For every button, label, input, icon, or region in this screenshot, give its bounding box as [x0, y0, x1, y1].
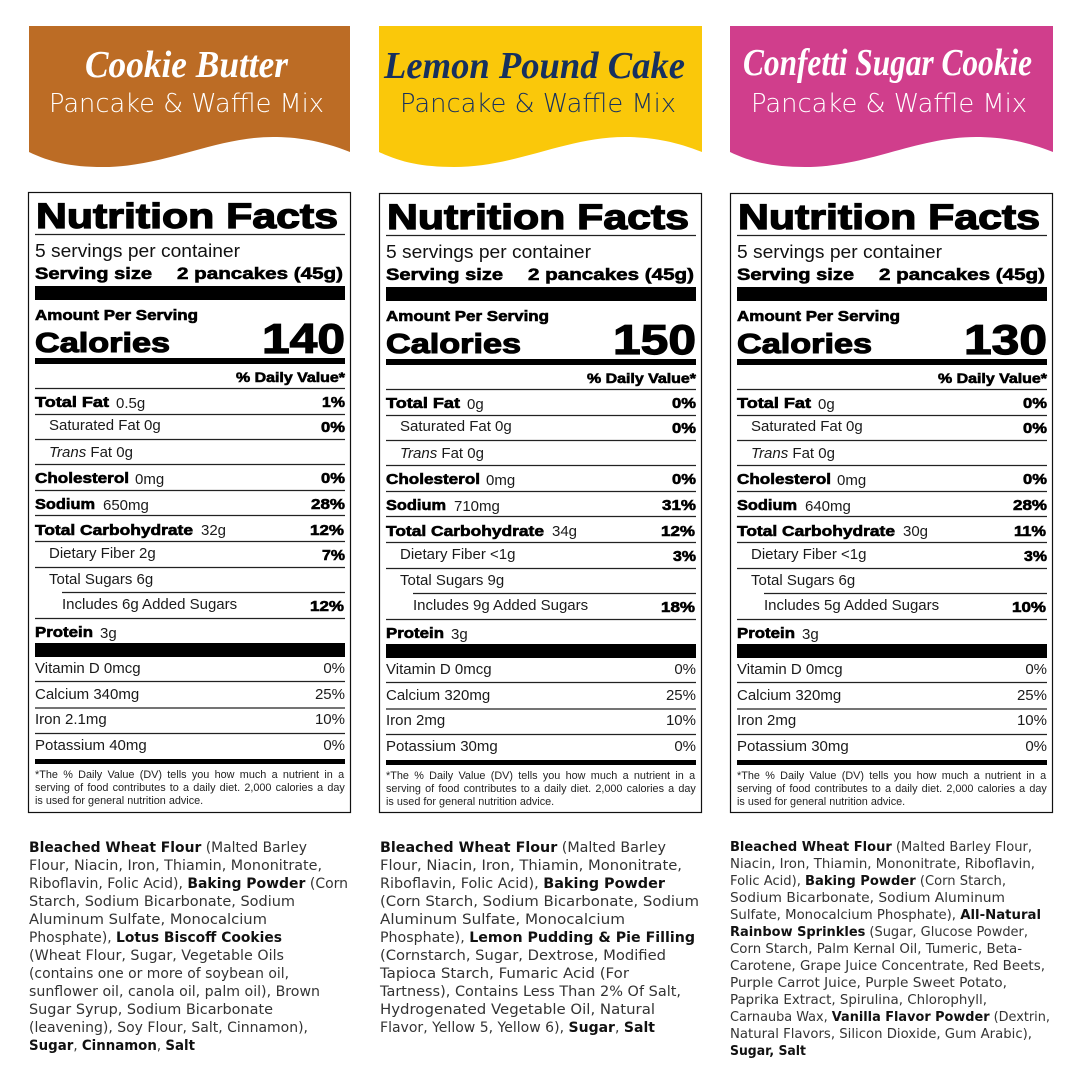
nutrient rows: 0% [1023, 420, 1047, 437]
vitamins and minerals: 0% [1025, 738, 1047, 755]
vitamins and minerals: Vitamin D 0mcg [35, 660, 141, 677]
calories [35, 308, 346, 385]
nutrient rows: 30g [903, 523, 928, 540]
vitamins and minerals: Vitamin D 0mcg [737, 661, 843, 678]
nutrient rows: 0% [672, 471, 696, 488]
nutrient rows: 0.5g [116, 395, 145, 412]
panel: nutrition facts confetti sugar cookie [730, 194, 1052, 812]
nutrient rows: 1% [322, 394, 345, 411]
calories: Calories [386, 328, 521, 359]
vitamins and minerals: 0% [1025, 661, 1047, 678]
text block: confetti sugar cookie ingredients: Carnauba Wax, Vanilla Flavor Powder (Dextrin, [730, 1010, 1050, 1025]
nutrient rows: 0% [672, 420, 696, 437]
text block: lemon pound cake ingredients: Aluminum Sulfate, Monocalcium [380, 912, 625, 928]
vitamins and minerals: 25% [666, 687, 696, 704]
servings [35, 240, 343, 283]
text block: lemon pound cake ingredients: (Corn Starch, Sodium Bicarbonate, Sodium [380, 894, 699, 910]
text block: cookie butter ingredients: Phosphate), Lotus Biscoff Cookies [29, 930, 282, 946]
nutrient rows: 12% [310, 598, 344, 615]
footnote: is used for general nutrition advice. [737, 796, 905, 808]
calories: Calories [35, 327, 170, 358]
vitamins and minerals: Potassium 30mg [737, 738, 849, 755]
nutrient rows: 11% [1014, 523, 1046, 540]
title: Nutrition Facts [36, 197, 338, 236]
text block: confetti sugar cookie ingredients: Folic Acid), Baking Powder (Corn Starch, [730, 874, 1006, 889]
vitamins and minerals: 25% [1017, 687, 1047, 704]
text block: lemon pound cake ingredients: Bleached Wheat Flour (Malted Barley [380, 840, 666, 856]
text block: confetti sugar cookie ingredients: Purple Carrot Juice, Purple Sweet Potato, [730, 976, 1007, 991]
nutrient rows: 0% [672, 395, 696, 412]
footnote [35, 769, 345, 807]
nutrient rows: 3% [1024, 548, 1047, 565]
footnote: is used for general nutrition advice. [386, 796, 554, 808]
text block: cookie butter ingredients: (leavening), Soy Flour, Salt, Cinnamon), [29, 1020, 308, 1036]
nutrient rows: Total Sugars 6g [751, 572, 855, 589]
calories: Amount Per Serving [35, 308, 198, 324]
nutrient rows: 3g [802, 626, 819, 643]
nutrient rows: Includes 9g Added Sugars [413, 597, 588, 614]
text block: cookie butter ingredients [29, 840, 348, 1054]
panel: cookie butter banner [29, 26, 350, 167]
calories: 140 [262, 315, 345, 362]
footnote: serving of food contributes to a daily diet. 2,000 calories a day [386, 783, 696, 795]
vitamins and minerals [386, 661, 696, 755]
nutrient rows: 650mg [103, 497, 149, 514]
text block: lemon pound cake ingredients: Phosphate), Lemon Pudding & Pie Filling [380, 930, 695, 946]
nutrient rows: 0% [1023, 471, 1047, 488]
vitamins and minerals: 25% [315, 686, 345, 703]
nutrient rows: 31% [662, 497, 696, 514]
text block: lemon pound cake ingredients: Flour, Niacin, Iron, Thiamin, Mononitrate, [380, 858, 682, 874]
nutrient rows: 0% [321, 419, 345, 436]
nutrient rows: Protein [35, 624, 93, 641]
nutrient rows: Cholesterol [737, 471, 831, 488]
nutrient rows: Dietary Fiber <1g [400, 546, 515, 563]
text block: confetti sugar cookie ingredients: Bleached Wheat Flour (Malted Barley Flour, [730, 840, 1032, 855]
text block: cookie butter ingredients: Sugar Syrup, Sodium Bicarbonate [29, 1002, 273, 1018]
text block: cookie butter ingredients: (Wheat Flour, Sugar, Vegetable Oils [29, 948, 284, 964]
text block: lemon pound cake ingredients: Tartness), Contains Less Than 2% Of Salt, [379, 984, 681, 1000]
text block: cookie butter ingredients: Starch, Sodium Bicarbonate, Sodium [29, 894, 295, 910]
text block: confetti sugar cookie ingredients: Niacin, Iron, Thiamin, Mononitrate, Riboflavin, [730, 857, 1035, 872]
nutrient rows: 0g [467, 396, 484, 413]
nutrient rows: Saturated Fat 0g [400, 418, 512, 435]
nutrient rows: Trans Fat 0g [49, 444, 133, 461]
nutrient rows [35, 394, 345, 642]
nutrient rows: Cholesterol [35, 470, 129, 487]
nutrient rows: Dietary Fiber 2g [49, 545, 156, 562]
text block: lemon pound cake ingredients: Tapioca Starch, Fumaric Acid (For [379, 966, 629, 982]
vitamins and minerals: Calcium 340mg [35, 686, 139, 703]
text block: lemon pound cake ingredients: (Cornstarch, Sugar, Dextrose, Modified [380, 948, 666, 964]
vitamins and minerals: 10% [666, 712, 696, 729]
footnote [386, 770, 696, 808]
vitamins and minerals [737, 661, 1047, 755]
nutrient rows: Dietary Fiber <1g [751, 546, 866, 563]
nutrient rows: 34g [552, 523, 577, 540]
text block: cookie butter ingredients: Bleached Wheat Flour (Malted Barley [29, 840, 307, 856]
text block: confetti sugar cookie ingredients: Sugar, Salt [730, 1044, 807, 1059]
nutrient rows: Sodium [386, 497, 446, 514]
vitamins and minerals: Iron 2mg [737, 712, 796, 729]
servings: Serving size [737, 265, 854, 284]
calories: Amount Per Serving [386, 309, 549, 325]
nutrient rows: Protein [737, 625, 795, 642]
nutrient rows: Trans Fat 0g [400, 445, 484, 462]
text block: lemon pound cake ingredients [379, 840, 699, 1036]
calories [737, 309, 1048, 386]
title: Nutrition Facts [738, 198, 1040, 237]
vitamins and minerals: Calcium 320mg [386, 687, 490, 704]
text block: lemon pound cake ingredients: Hydrogenated Vegetable Oil, Natural [380, 1002, 655, 1018]
vitamins and minerals: 0% [674, 738, 696, 755]
vitamins and minerals: Iron 2.1mg [35, 711, 107, 728]
subheading: mix: Pancake & Waffle Mix [751, 89, 1027, 119]
vitamins and minerals: 0% [674, 661, 696, 678]
nutrient rows: Trans Fat 0g [751, 445, 835, 462]
text block: confetti sugar cookie ingredients: Rainbow Sprinkles (Sugar, Glucose Powder, [730, 925, 1028, 940]
servings [737, 241, 1045, 284]
panel: nutrition facts lemon pound cake [380, 194, 702, 812]
nutrient rows: Sodium [35, 496, 95, 513]
vitamins and minerals: Vitamin D 0mcg [386, 661, 492, 678]
nutrient rows: Total Carbohydrate [386, 523, 544, 540]
nutrient rows: 0% [1023, 395, 1047, 412]
panel: nutrition facts cookie butter [28, 192, 350, 812]
text block: confetti sugar cookie ingredients: Natural Flavors, Silicon Dioxide, Gum Arabic), [730, 1027, 1032, 1042]
nutrient rows: Total Carbohydrate [35, 522, 193, 539]
nutrient rows: 18% [661, 599, 695, 616]
vitamins and minerals: 0% [323, 737, 345, 754]
calories [386, 309, 697, 386]
nutrient rows: 12% [661, 523, 695, 540]
heading: lemon pound cake: Lemon Pound Cake [383, 45, 685, 87]
calories: % Daily Value* [938, 371, 1048, 386]
nutrient rows: 640mg [805, 498, 851, 515]
servings [386, 241, 694, 284]
title: Nutrition Facts [387, 198, 689, 237]
servings: 5 servings per container [737, 241, 942, 262]
nutrient rows: 12% [310, 522, 344, 539]
vitamins and minerals: 10% [315, 711, 345, 728]
servings: 2 pancakes (45g) [528, 265, 694, 284]
servings: 5 servings per container [386, 241, 591, 262]
nutrient rows: 3% [673, 548, 696, 565]
heading: cookie butter: Cookie Butter [85, 44, 289, 86]
text block: cookie butter ingredients: Riboflavin, Folic Acid), Baking Powder (Corn [29, 876, 348, 892]
text block: confetti sugar cookie ingredients: Carotene, Grape Juice Concentrate, Red Beets, [730, 959, 1045, 974]
nutrient rows: Total Sugars 9g [400, 572, 504, 589]
nutrient rows: 3g [100, 625, 117, 642]
footnote: is used for general nutrition advice. [35, 795, 203, 807]
nutrient rows: 28% [1013, 497, 1047, 514]
text block: cookie butter ingredients: Aluminum Sulfate, Monocalcium [29, 912, 267, 928]
servings: 2 pancakes (45g) [879, 265, 1045, 284]
nutrient rows: Total Fat [35, 394, 109, 411]
text block: confetti sugar cookie ingredients: Corn Starch, Palm Kernal Oil, Tumeric, Beta- [730, 942, 1022, 957]
nutrient rows: 0g [818, 396, 835, 413]
servings: Serving size [35, 264, 152, 283]
nutrient rows: Total Fat [386, 395, 460, 412]
nutrient rows: Includes 6g Added Sugars [62, 596, 237, 613]
nutrient rows: 0mg [837, 472, 866, 489]
calories: 130 [964, 316, 1047, 363]
vitamins and minerals: Potassium 40mg [35, 737, 147, 754]
subheading: mix: Pancake & Waffle Mix [400, 89, 676, 119]
nutrient rows: 0mg [486, 472, 515, 489]
footnote: *The % Daily Value (DV) tells you how much a nutrient in a [35, 769, 345, 781]
panel: lemon pound cake banner [379, 26, 702, 167]
text block: cookie butter ingredients: Flour, Niacin, Iron, Thiamin, Mononitrate, [29, 858, 322, 874]
vitamins and minerals: Calcium 320mg [737, 687, 841, 704]
servings: Serving size [386, 265, 503, 284]
nutrient rows: Saturated Fat 0g [49, 417, 161, 434]
nutrient rows: Protein [386, 625, 444, 642]
text block: lemon pound cake ingredients: Flavor, Yellow 5, Yellow 6), Sugar, Salt [380, 1020, 655, 1036]
calories: 150 [613, 316, 696, 363]
nutrient rows: Includes 5g Added Sugars [764, 597, 939, 614]
vitamins and minerals: 10% [1017, 712, 1047, 729]
vitamins and minerals: Iron 2mg [386, 712, 445, 729]
nutrient rows: 3g [451, 626, 468, 643]
servings: 5 servings per container [35, 240, 240, 261]
nutrient rows: Cholesterol [386, 471, 480, 488]
vitamins and minerals: Potassium 30mg [386, 738, 498, 755]
text block: lemon pound cake ingredients: Riboflavin, Folic Acid), Baking Powder [380, 876, 665, 892]
nutrient rows: 32g [201, 522, 226, 539]
calories: % Daily Value* [236, 370, 346, 385]
footnote: serving of food contributes to a daily diet. 2,000 calories a day [737, 783, 1047, 795]
nutrient rows [737, 395, 1047, 643]
footnote: serving of food contributes to a daily diet. 2,000 calories a day [35, 782, 345, 794]
nutrient rows: 710mg [454, 498, 500, 515]
calories: Calories [737, 328, 872, 359]
nutrient rows: 0mg [135, 471, 164, 488]
vitamins and minerals [35, 660, 345, 754]
calories: % Daily Value* [587, 371, 697, 386]
vitamins and minerals: 0% [323, 660, 345, 677]
nutrient rows: Sodium [737, 497, 797, 514]
text block: confetti sugar cookie ingredients [730, 840, 1050, 1059]
nutrient rows: Total Sugars 6g [49, 571, 153, 588]
nutrient rows: Total Carbohydrate [737, 523, 895, 540]
footnote: *The % Daily Value (DV) tells you how much a nutrient in a [386, 770, 696, 782]
text block: confetti sugar cookie ingredients: Paprika Extract, Spirulina, Chlorophyll, [730, 993, 987, 1008]
text block: cookie butter ingredients: sunflower oil, canola oil, palm oil), Brown [29, 984, 320, 1000]
subheading: mix: Pancake & Waffle Mix [49, 89, 324, 119]
footnote: *The % Daily Value (DV) tells you how much a nutrient in a [737, 770, 1047, 782]
nutrient rows: 10% [1012, 599, 1046, 616]
nutrient rows: Total Fat [737, 395, 811, 412]
nutrient rows: 7% [322, 547, 345, 564]
nutrient rows [386, 395, 696, 643]
text block: cookie butter ingredients: Sugar, Cinnamon, Salt [29, 1038, 195, 1054]
nutrient rows: Saturated Fat 0g [751, 418, 863, 435]
nutrient rows: 0% [321, 470, 345, 487]
footnote [737, 770, 1047, 808]
panel: confetti sugar cookie banner [730, 26, 1053, 167]
text block: cookie butter ingredients: (contains one or more of soybean oil, [29, 966, 289, 982]
servings: 2 pancakes (45g) [177, 264, 343, 283]
calories: Amount Per Serving [737, 309, 900, 325]
nutrient rows: 28% [311, 496, 345, 513]
text block: confetti sugar cookie ingredients: Sodium Bicarbonate, Sodium Aluminum [730, 891, 1005, 906]
text block: confetti sugar cookie ingredients: Sulfate, Monocalcium Phosphate), All-Natural [730, 908, 1041, 923]
